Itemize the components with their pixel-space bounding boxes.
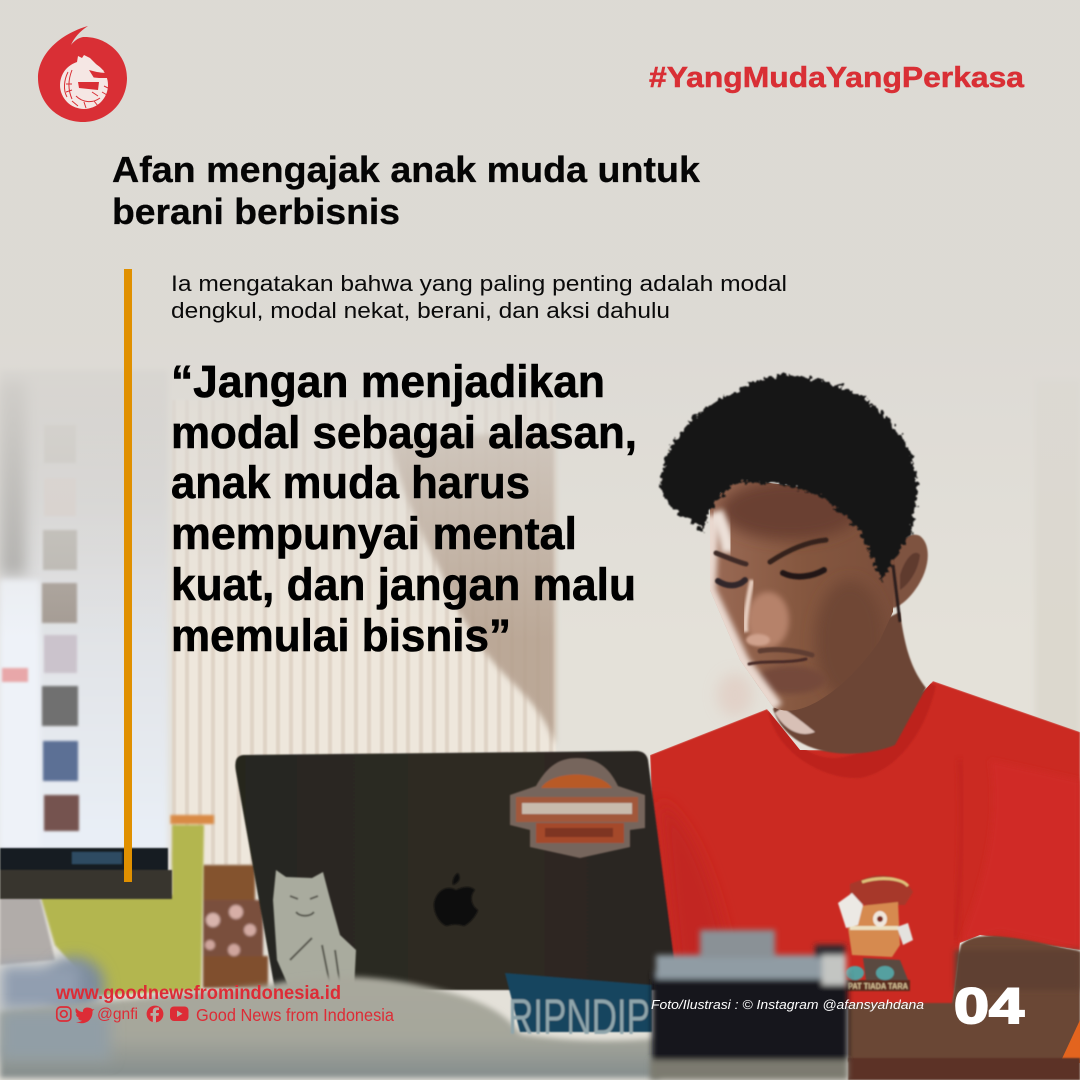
man in red shirt: [650, 375, 1080, 1080]
icon: apple logo: [434, 873, 478, 926]
sticker: orange badge: [510, 758, 645, 858]
monitor bezel: [0, 848, 172, 899]
blurred pink object: [717, 673, 753, 717]
lit left edge of face: [708, 515, 776, 708]
sticker: RIPNDIP: [505, 973, 652, 1045]
quote: kuat, dan jangan malu: [171, 559, 636, 610]
intro text: Ia mengatakan bahwa yang paling penting adalah modal: [171, 271, 787, 296]
handle: @gnfi: [97, 1006, 138, 1023]
heading: berani berbisnis: [112, 191, 400, 232]
quote: [171, 356, 637, 661]
shirt mascot print: [838, 875, 913, 991]
icon: twitter: [76, 1008, 94, 1023]
blurred left foreground haze: [0, 1010, 110, 1060]
quote: modal sebagai alasan,: [171, 407, 637, 458]
footer: social row: [57, 1005, 394, 1025]
hashtag: #YangMudaYangPerkasa: [649, 62, 1025, 94]
shirt mascot print: PAT TIADA TARA: [848, 982, 908, 991]
heading: Afan mengajak anak muda untuk: [112, 149, 701, 190]
neck: [773, 612, 926, 754]
tan curtain ornament: [390, 430, 555, 745]
yellow-green cup: [40, 815, 214, 995]
top fade over the backdrop: [0, 0, 1080, 640]
page name: Good News from Indonesia: [196, 1005, 394, 1025]
sticker: white cat: [273, 870, 356, 990]
ear: [885, 535, 928, 608]
blurred computer monitor: [0, 370, 172, 899]
brows, eyes and mouth: [716, 540, 826, 664]
intro text: dengkul, modal nekat, berani, dan aksi dahulu: [171, 298, 670, 323]
monitor thumbnails: [2, 425, 79, 831]
laptop: [235, 751, 678, 990]
icon: logo GNFI: [38, 26, 127, 122]
quote: mempunyai mental: [171, 508, 577, 559]
quote: “Jangan menjadikan: [171, 356, 605, 407]
sticker: RIPNDIP: RIPNDIP: [508, 989, 650, 1045]
face: [708, 478, 895, 711]
shirt: [650, 680, 1080, 1010]
photo credit: Foto/Ilustrasi : © Instagram @afansyahdana: [651, 997, 924, 1012]
icon: instagram: [57, 1007, 71, 1021]
icon: youtube: [170, 1006, 188, 1021]
quote: memulai bisnis”: [171, 610, 511, 661]
sideburn: [893, 565, 900, 622]
hair: [660, 375, 917, 582]
page number: 04: [954, 978, 1024, 1034]
camera: [650, 930, 848, 1080]
wall right panel: [1035, 380, 1080, 740]
pleated curtain: [172, 400, 556, 865]
icon: facebook: [147, 1006, 163, 1022]
heading: [112, 149, 701, 232]
orange accent bar: [124, 269, 132, 882]
intro text: [171, 271, 787, 323]
lower left objects: [0, 898, 105, 1013]
arm: [848, 936, 1080, 1080]
blurred foreground table: [0, 976, 660, 1078]
wooden shelf and flowers: [203, 865, 268, 988]
footer: website: www.goodnewsfromindonesia.id: [55, 983, 341, 1004]
nose: [747, 592, 789, 648]
quote: anak muda harus: [171, 457, 530, 508]
face shading: [720, 480, 860, 540]
